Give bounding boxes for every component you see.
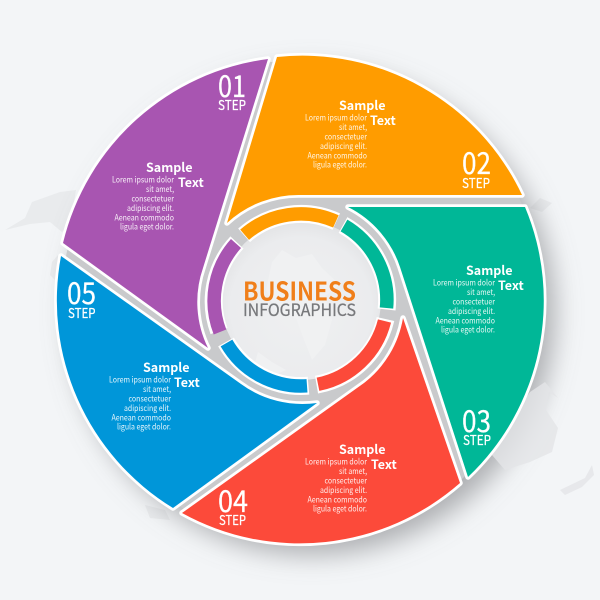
step 05 text: Aenean commodo xyxy=(112,411,171,423)
step 02 text: sit amet, xyxy=(339,121,367,133)
step 02 text: Text xyxy=(370,110,396,129)
step 02 text: Lorem ipsum dolor xyxy=(305,112,368,124)
center title xyxy=(243,272,356,321)
step 01 text: Text xyxy=(178,172,204,191)
inner disc map xyxy=(254,250,340,378)
step 04 text: Sample xyxy=(339,439,386,458)
step 03 text: Sample xyxy=(466,260,512,279)
inner ring xyxy=(214,214,387,386)
ring segment: purple xyxy=(214,242,237,332)
inner disc xyxy=(221,220,381,380)
segment: red xyxy=(182,318,460,543)
step 03 text: ligula eget dolor. xyxy=(441,324,495,336)
step 04 text: Text xyxy=(371,454,397,473)
drop shadow of circle xyxy=(69,69,555,555)
segment: blue xyxy=(57,256,317,508)
step 01 text: sit amet, xyxy=(146,183,174,195)
step 02 text: adipiscing elit. xyxy=(320,140,367,152)
step 04 text: consectetuer xyxy=(324,474,368,486)
step 01 label: STEP xyxy=(218,94,246,114)
step 03 text xyxy=(433,260,524,336)
step 01 text: Aenean commodo xyxy=(114,211,174,223)
step 01 text: Lorem ipsum dolor xyxy=(112,174,175,186)
step 04 label: 04 xyxy=(218,477,248,521)
segments xyxy=(57,56,544,543)
step 03 text: consectetuer xyxy=(452,295,496,307)
step 05 label: STEP xyxy=(68,302,96,322)
center title: BUSINESS xyxy=(243,272,356,308)
ring segment: blue xyxy=(226,342,308,386)
world map over shadow: australia xyxy=(492,382,594,495)
step 05 text: sit amet, xyxy=(143,383,171,395)
segment: teal xyxy=(348,207,544,477)
step 02 text: ligula eget dolor. xyxy=(313,159,367,171)
step 01 text xyxy=(112,157,204,233)
step 05 text: ligula eget dolor. xyxy=(117,421,171,433)
step 01 text: adipiscing elit. xyxy=(127,202,174,214)
step 03 text: Lorem ipsum dolor xyxy=(433,276,496,288)
step 04 label: STEP xyxy=(219,509,246,529)
ring segment: teal xyxy=(343,225,387,310)
step 05 text xyxy=(109,357,200,433)
step 04 text: adipiscing elit. xyxy=(320,484,367,496)
step 01 text: consectetuer xyxy=(132,192,175,204)
segment: purple xyxy=(63,59,268,348)
step 04 text: ligula eget dolor. xyxy=(313,503,367,515)
segment: orange xyxy=(227,56,522,223)
step 03 text: Text xyxy=(498,275,524,294)
gray base disc xyxy=(62,60,542,540)
step 05 text: Text xyxy=(174,372,200,391)
ring segment: orange xyxy=(244,214,336,235)
step 05 text: Lorem ipsum dolor xyxy=(109,374,172,386)
step 01 text: ligula eget dolor. xyxy=(120,221,174,233)
step 05 text: adipiscing elit. xyxy=(124,402,171,414)
step 02 text xyxy=(305,95,396,171)
step 03 text: adipiscing elit. xyxy=(448,305,495,317)
step 01 label: 01 xyxy=(218,62,246,106)
step 02 label: 02 xyxy=(462,139,491,183)
ring segment: red xyxy=(316,319,386,385)
step 03 text: Aenean commodo xyxy=(436,314,495,326)
step 04 text: sit amet, xyxy=(339,465,367,477)
step 02 text: Sample xyxy=(339,95,386,114)
step 05 label: 05 xyxy=(67,269,96,313)
center title: INFOGRAPHICS xyxy=(243,297,356,321)
step 05 text: Sample xyxy=(143,357,190,376)
step 03 text: sit amet, xyxy=(467,286,495,298)
step 04 text xyxy=(305,439,397,515)
step 05 text: consectetuer xyxy=(128,392,172,404)
step 04 text: Aenean commodo xyxy=(308,493,367,505)
step 02 text: consectetuer xyxy=(324,130,368,142)
step 02 label: STEP xyxy=(462,172,490,192)
world map background xyxy=(5,190,552,520)
step 01 text: Sample xyxy=(146,157,192,176)
step 03 label: 03 xyxy=(462,397,491,441)
step 02 text: Aenean commodo xyxy=(308,149,367,161)
step 04 text: Lorem ipsum dolor xyxy=(305,456,368,468)
step 03 label: STEP xyxy=(463,429,491,449)
